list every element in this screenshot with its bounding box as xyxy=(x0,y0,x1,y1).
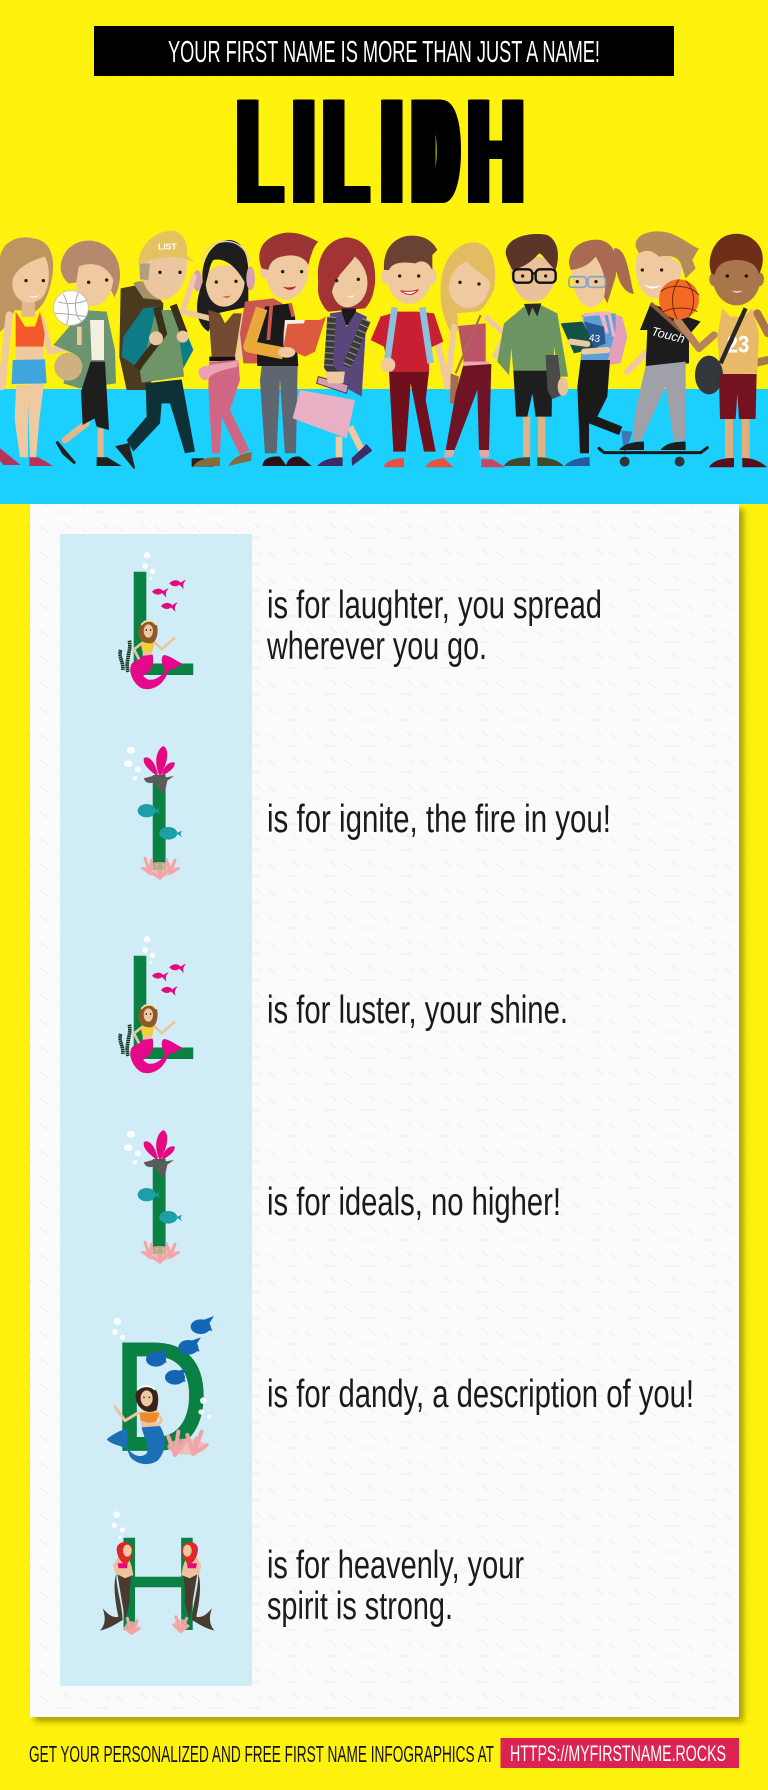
title: LILIDH: H xyxy=(468,67,524,235)
row 2 letter I with volcano xyxy=(124,746,182,900)
bubbles xyxy=(142,936,155,964)
letter L: L xyxy=(123,924,198,1092)
bubbles xyxy=(124,1131,141,1165)
letter D: D xyxy=(112,1310,209,1483)
letter L: L xyxy=(123,540,198,708)
skateboard xyxy=(599,448,707,467)
light blue letter column xyxy=(60,534,252,1686)
row 1 letter L with pink mermaid xyxy=(120,540,198,708)
teal fish xyxy=(138,1188,182,1224)
person 12: boy in yellow jersey with black bag: 23 xyxy=(727,331,749,358)
pink fish xyxy=(152,580,186,612)
row 6 letter H with twin red-haired mermaids xyxy=(100,1510,215,1659)
person 7: boy in red shirt with blue straps xyxy=(371,236,453,467)
line for H: is for heavenly, your xyxy=(267,1544,524,1587)
title: LILIDH xyxy=(237,67,524,235)
line for I: is for ignite, the fire in you! xyxy=(267,798,611,841)
volcano xyxy=(144,775,174,792)
pink splash xyxy=(144,1130,175,1161)
title: LILIDH: D xyxy=(416,67,455,235)
letter I: I xyxy=(140,1130,178,1284)
volcano xyxy=(144,1159,174,1176)
line for L xyxy=(266,584,602,668)
line for second L: is for luster, your shine. xyxy=(267,989,568,1032)
title: LILIDH: I xyxy=(294,67,314,235)
bubbles xyxy=(112,1511,125,1539)
mermaid xyxy=(130,1005,182,1073)
person 4: girl with pink headphones xyxy=(183,240,255,467)
title: LILIDH: L xyxy=(324,67,367,235)
right mermaid xyxy=(181,1542,215,1631)
teal fish xyxy=(138,804,182,840)
person 6: girl in purple vest with pink bag xyxy=(293,237,375,466)
person 2: girl in green jacket with volleyball xyxy=(53,241,122,466)
letter I: I xyxy=(140,746,178,900)
seaweed xyxy=(120,641,130,672)
white content panel xyxy=(30,504,739,1717)
line for H: spirit is strong. xyxy=(267,1585,453,1628)
blue floor band xyxy=(0,389,768,504)
bubbles xyxy=(142,552,155,580)
person 10: girl with ponytail and tablet: 43 xyxy=(588,333,601,345)
mermaid xyxy=(107,1386,165,1464)
bubbles xyxy=(112,1318,211,1419)
person 5: boy with red hair reading a book xyxy=(240,233,326,466)
person 3: boy with cap and large backpack: LIST xyxy=(158,241,177,251)
title: LILIDH: L xyxy=(238,67,281,235)
person 3: boy with cap and large backpack xyxy=(117,231,213,468)
blue fish xyxy=(146,1316,214,1385)
row 4 letter I with volcano xyxy=(124,1130,182,1284)
top banner xyxy=(94,26,674,76)
bubbles xyxy=(124,747,141,781)
group of twelve young people xyxy=(0,231,768,468)
line for second I: is for ideals, no higher! xyxy=(267,1181,561,1224)
title: LILIDH: I xyxy=(382,67,402,235)
line for H xyxy=(267,1544,524,1628)
row 5 letter D with blue mermaid xyxy=(107,1310,214,1483)
line for L: wherever you go. xyxy=(266,625,487,668)
person 11: boy with basketball on skateboard xyxy=(619,231,714,450)
seaweed xyxy=(120,1025,130,1056)
person 11: boy with basketball on skateboard: Touch xyxy=(650,324,686,346)
coral xyxy=(167,1432,207,1455)
person 9: boy with black glasses in green sweater xyxy=(497,234,568,466)
line for L: is for laughter, you spread xyxy=(267,584,602,627)
person 1: girl in orange top xyxy=(0,237,77,466)
coral xyxy=(143,858,178,878)
person 8: blonde girl in pink top xyxy=(441,242,506,467)
left mermaid xyxy=(100,1542,133,1631)
row 3 letter L with pink mermaid xyxy=(120,924,198,1092)
person 12: boy in yellow jersey with black bag xyxy=(695,234,768,467)
mermaid xyxy=(130,621,182,689)
pink splash xyxy=(144,746,175,777)
person 10: girl with ponytail and tablet xyxy=(561,240,634,466)
coral xyxy=(125,1617,188,1633)
letter H: H xyxy=(113,1510,203,1659)
pink fish xyxy=(152,964,186,996)
coral xyxy=(143,1242,178,1262)
